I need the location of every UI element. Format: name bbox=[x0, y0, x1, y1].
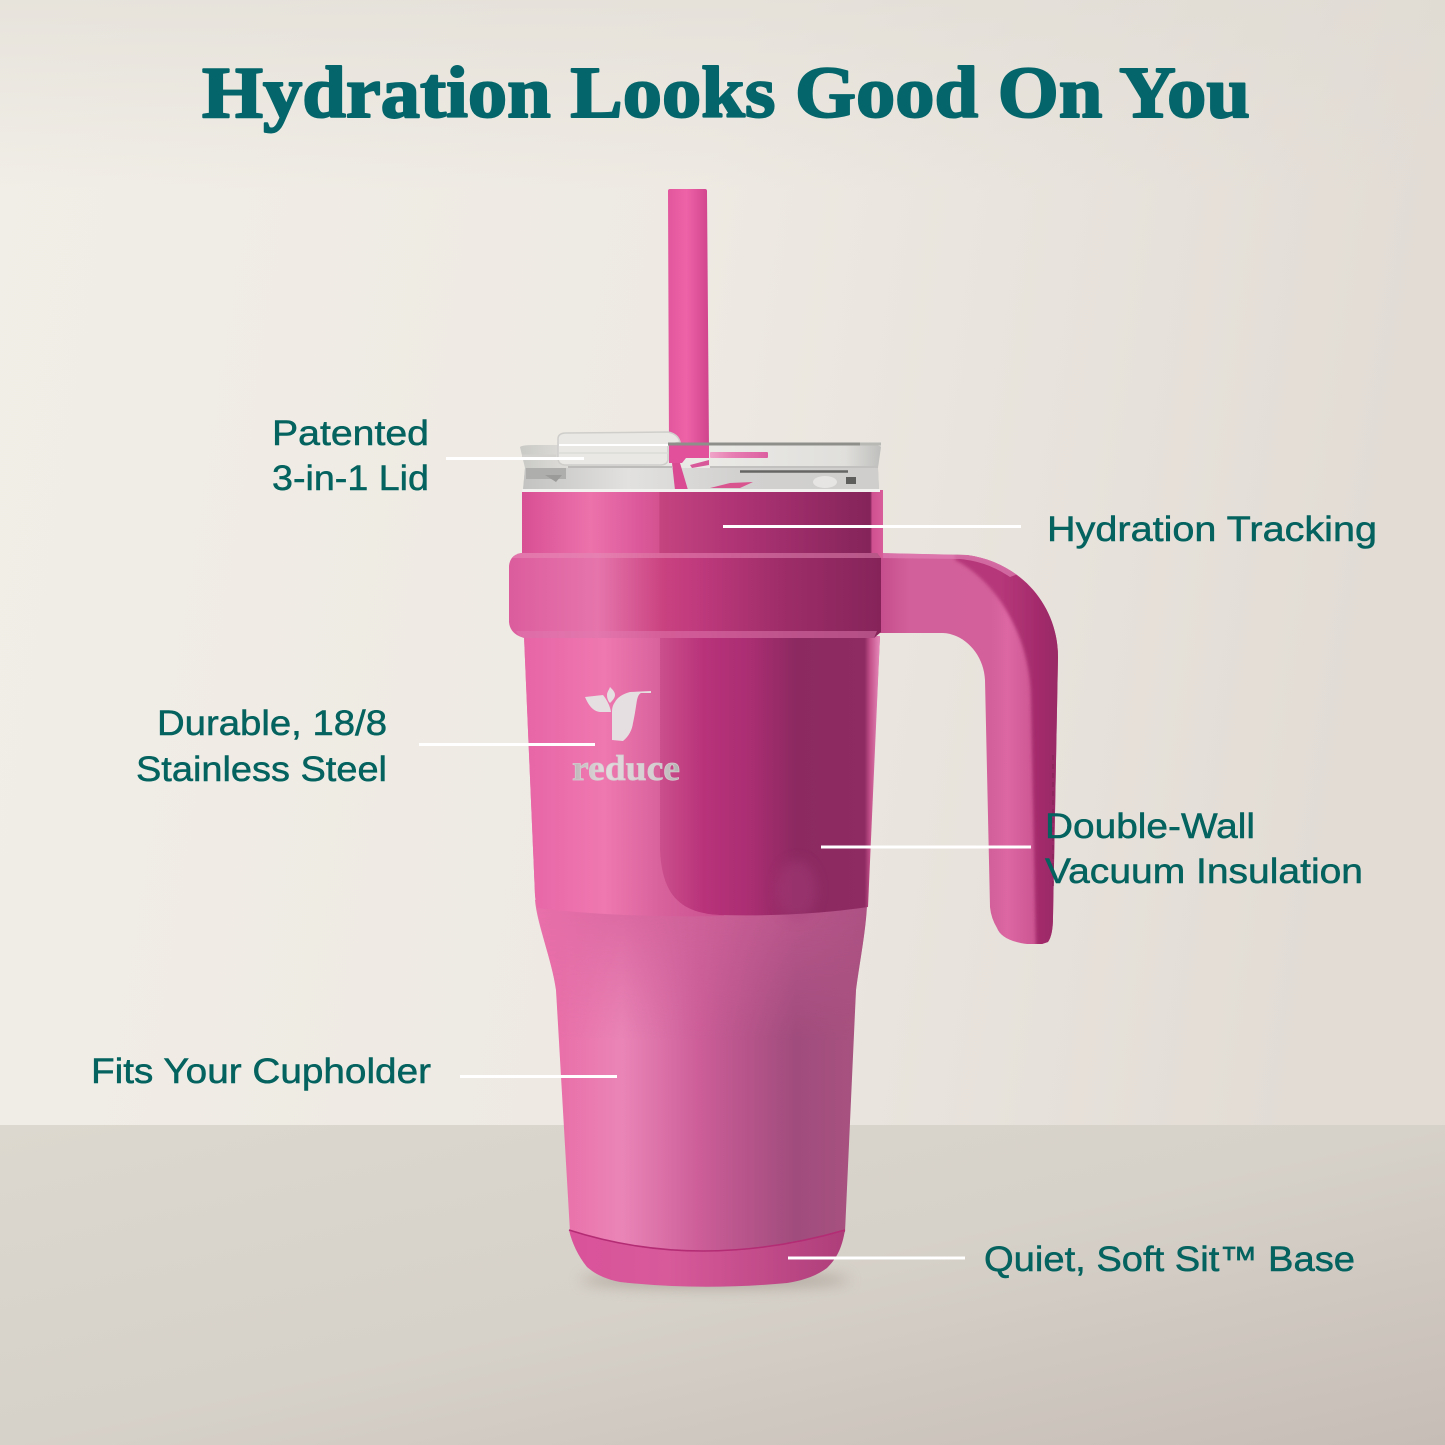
leader lines bbox=[419, 458, 1031, 1258]
handle bbox=[877, 553, 1070, 950]
label: Patented 3-in-1 Lid: Patented bbox=[272, 414, 429, 453]
gloss reflection bbox=[784, 865, 812, 914]
shadow under tumbler bbox=[580, 1272, 850, 1288]
label: Double-Wall Vacuum Insulation bbox=[1045, 807, 1363, 891]
silicone band bbox=[509, 553, 881, 638]
engraved marks on handle bbox=[1052, 755, 1054, 890]
label: Durable, 18/8 Stainless Steel: Durable, 18/8 bbox=[157, 704, 387, 743]
tumbler illustration bbox=[509, 189, 1070, 1287]
middle body light side bbox=[524, 636, 724, 916]
logo: reduce bbox=[572, 687, 680, 788]
base bbox=[569, 1230, 845, 1287]
label: Patented 3-in-1 Lid bbox=[272, 414, 429, 498]
label: Quiet, Soft Sit Base: Quiet, Soft Sit™ Base bbox=[984, 1240, 1355, 1279]
lid slider button bbox=[558, 432, 680, 465]
label: Fits Your Cupholder: Fits Your Cupholder bbox=[91, 1052, 431, 1091]
straw seen through lid bbox=[669, 445, 709, 463]
middle body glossy dark side bbox=[660, 636, 880, 915]
clear lid bbox=[520, 432, 881, 492]
background: table surface bbox=[0, 1125, 1445, 1445]
lower body bbox=[524, 636, 880, 1256]
title: Hydration Looks Good On You bbox=[202, 52, 1250, 133]
background: wall bbox=[0, 0, 1445, 1126]
logo: reduce: reduce bbox=[572, 748, 680, 788]
label: Durable, 18/8 Stainless Steel bbox=[136, 704, 387, 789]
label: Durable, 18/8 Stainless Steel: Stainless Steel bbox=[136, 750, 387, 789]
label: Double-Wall Vacuum Insulation: Vacuum Insulation bbox=[1045, 852, 1363, 891]
label: Double-Wall Vacuum Insulation: Double-Wall bbox=[1045, 807, 1255, 846]
straw bbox=[668, 189, 709, 450]
label: Hydration Tracking: Hydration Tracking bbox=[1047, 510, 1377, 549]
label: Patented 3-in-1 Lid: 3-in-1 Lid bbox=[272, 459, 429, 498]
upper body bbox=[522, 490, 883, 558]
